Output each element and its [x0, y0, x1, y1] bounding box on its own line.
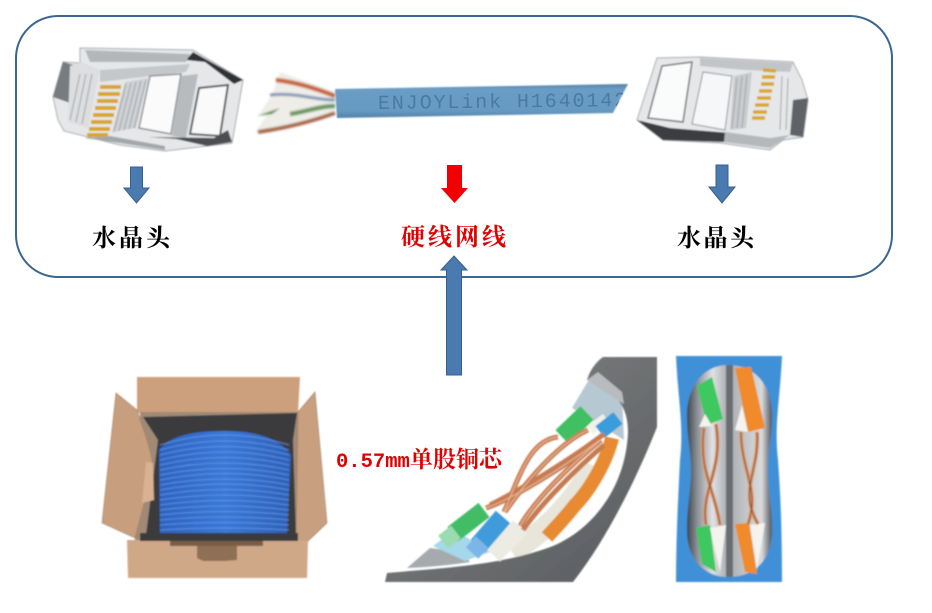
foil bottom	[433, 530, 490, 561]
icon: right RJ45 crystal connector	[637, 57, 808, 150]
arrow: up arrow	[441, 256, 467, 375]
callout: copper core label: 0.57mm	[336, 451, 410, 474]
white wires	[710, 525, 726, 572]
orange wires	[735, 367, 765, 432]
cable jacket	[335, 84, 628, 118]
box left flap	[102, 393, 153, 538]
copper strands	[486, 430, 604, 530]
orange wire	[547, 438, 612, 537]
gray jacket	[385, 357, 657, 582]
inner cavity	[687, 365, 772, 577]
fanned wires	[255, 72, 335, 133]
icon: left RJ45 crystal connector	[53, 48, 243, 151]
blue sleeve top	[600, 418, 618, 432]
blue jacket	[676, 356, 782, 582]
white sleeve bottom	[493, 527, 520, 555]
foil and braid backing	[572, 378, 624, 440]
box tab	[197, 545, 237, 561]
white wire	[512, 465, 592, 552]
label: right connector: 水晶头	[677, 225, 756, 252]
icon: cable with fanned wires	[255, 72, 628, 133]
box front	[127, 537, 308, 578]
panel: rounded frame	[16, 16, 892, 277]
twisted copper pairs	[703, 424, 758, 525]
box inner	[135, 412, 299, 540]
box back flap	[137, 377, 300, 413]
icon: cutaway cable	[385, 357, 657, 582]
label: solid cable: 硬线网线	[401, 224, 509, 251]
icon: cable cross-section	[676, 356, 782, 582]
shield braid bottom	[407, 548, 470, 568]
cable printed text: ENJOYLink H1640142	[378, 90, 628, 116]
cable spool	[159, 431, 291, 533]
green sleeve top	[562, 413, 587, 437]
green sleeve bottom	[453, 510, 484, 534]
white sleeve top	[590, 418, 606, 430]
callout: copper core label: 单股铜芯	[410, 447, 504, 472]
arrow: left down arrow	[124, 167, 149, 203]
box right flap	[296, 392, 327, 542]
arrow: right down arrow	[709, 165, 735, 203]
copper highlights	[703, 424, 758, 525]
green wires	[697, 377, 723, 425]
blue sleeve bottom	[478, 517, 503, 546]
icon: boxed cable spool	[102, 377, 327, 578]
arrow: red down arrow	[441, 165, 468, 203]
label: left connector: 水晶头	[92, 225, 173, 252]
shield braid top	[587, 372, 624, 404]
